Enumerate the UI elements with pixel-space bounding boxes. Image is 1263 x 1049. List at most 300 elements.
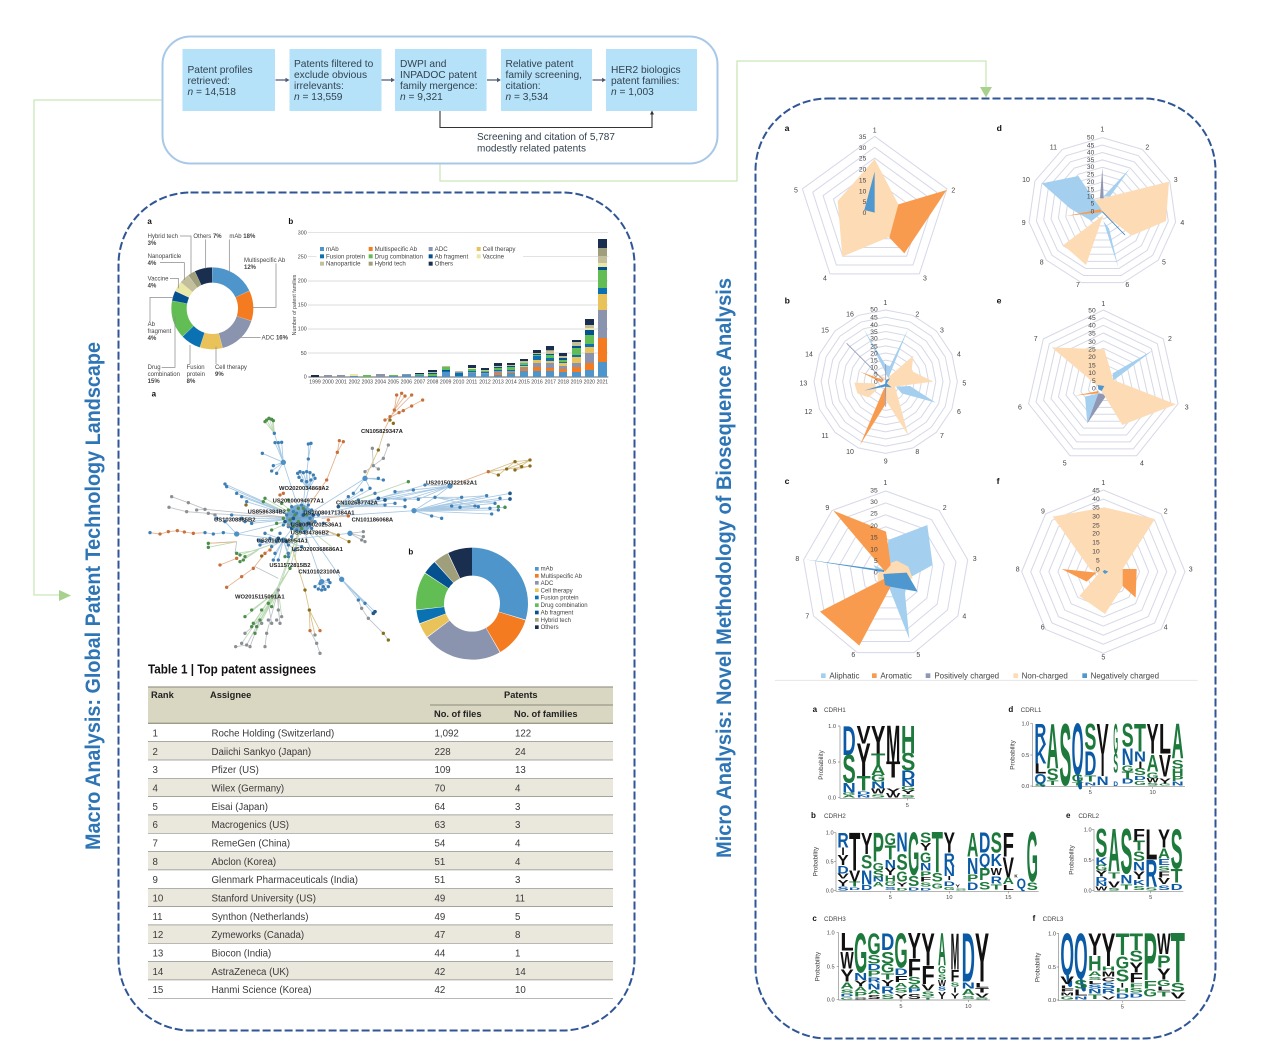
chart: radar d: 30 <box>1087 164 1095 171</box>
chart: sequence logo CDRH2: S <box>955 888 967 892</box>
table rows: 4 <box>515 784 521 794</box>
chart: sequence logo CDRH2: 5 <box>889 895 892 901</box>
chart: sequence logo CDRL3: Q <box>1060 920 1074 988</box>
text: screening note: modestly related patents <box>477 144 586 154</box>
chart: sequence logo CDRH1: a <box>813 705 818 714</box>
chart: radar e: 4 <box>1140 460 1144 467</box>
network nodes <box>150 393 530 653</box>
chart: sequence logo CDRL2: V <box>1108 879 1121 889</box>
secondary donut legend: mAb <box>541 567 554 573</box>
chart: radar d: 5 <box>1162 259 1166 266</box>
network patent labels: US20200368686A1 <box>292 547 344 553</box>
flow box: HER2 biologics families <box>606 49 697 111</box>
chart: sequence logo CDRH3: W <box>938 978 947 988</box>
chart: sequence logo CDRH1: Probability <box>818 749 825 780</box>
table rows: 4 <box>515 857 521 868</box>
chart: technology type donut: 3% <box>148 241 157 247</box>
chart: sequence logo CDRH3: G <box>854 922 867 986</box>
chart: sequence logo CDRH1: 5 <box>906 803 909 809</box>
chart: radar b: 1 <box>883 300 887 307</box>
chart: sequence logo CDRL1: Q <box>1034 771 1047 786</box>
chart: sequence logo CDRL3: Y <box>1088 927 1102 962</box>
chart: sequence logo CDRL2 <box>1066 811 1183 901</box>
chart: radar e: 5 <box>1092 378 1096 385</box>
chart: sequence logo CDRH2: G <box>885 881 896 888</box>
flow box: patent profiles retrieved: Patent profiles <box>188 65 253 76</box>
chart: sequence logo CDRH2: S <box>920 831 932 847</box>
table rows: 10 <box>515 985 526 996</box>
chart: sequence logo CDRL1: I <box>1138 760 1143 771</box>
chart: sequence logo CDRH3: S <box>854 996 867 1000</box>
chart: sequence logo CDRH2: T <box>849 880 862 889</box>
chart: radar d: 45 <box>1087 142 1095 149</box>
chart: bar chart axes and legend: 2006 <box>401 380 412 386</box>
chart: radar c: c <box>785 476 790 486</box>
chart: sequence logo CDRH1: V <box>857 721 871 749</box>
chart: sequence logo CDRH2: N <box>873 877 885 884</box>
chart: sequence logo CDRL2: D <box>1171 882 1183 892</box>
chart: sequence logo CDRL2: N <box>1095 881 1108 888</box>
legend: residue classes <box>775 671 1198 680</box>
chart: technology type donut: 4% <box>148 261 157 267</box>
chart: sequence logo CDRL1: A <box>1147 751 1159 778</box>
chart: sequence logo CDRH3: D <box>867 962 881 972</box>
table rows: 51 <box>434 857 445 868</box>
chart: sequence logo CDRH1: S <box>871 793 888 799</box>
chart: radar c: 6 <box>851 652 855 659</box>
table header: No. of families <box>514 709 578 719</box>
table rows: 14 <box>515 967 526 978</box>
table header: No. of files <box>434 709 482 719</box>
chart: radar c: 10 <box>870 547 878 554</box>
chart: sequence logo CDRL2: S <box>1095 822 1107 866</box>
chart: bar chart axes and legend: 2001 <box>335 380 347 386</box>
chart: sequence logo CDRL3: W <box>1157 928 1171 961</box>
text: S <box>1171 818 1183 881</box>
chart: sequence logo CDRH2 <box>811 811 1039 901</box>
chart: bar chart axes and legend: 2009 <box>440 380 452 386</box>
secondary donut legend: ADC <box>541 581 554 587</box>
chart: radar d: 3 <box>1174 177 1178 184</box>
secondary donut legend: Ab fragment <box>541 611 574 617</box>
chart: sequence logo CDRL2: G <box>1095 863 1107 873</box>
chart: sequence logo CDRL3: F <box>1060 988 1077 993</box>
bar chart legend: Others <box>435 261 453 268</box>
chart: radar f: f <box>997 476 1000 486</box>
chart: bar chart axes and legend: 100 <box>298 327 307 333</box>
chart: sequence logo CDRL1: V <box>1159 749 1171 784</box>
panel: macro analysis dashed frame <box>118 192 634 1030</box>
chart: sequence logo CDRL1: 0.0 <box>1021 784 1029 790</box>
chart: sequence logo CDRL2: S <box>1133 849 1145 864</box>
chart: radar b: 15 <box>870 357 878 364</box>
chart: radar d: 11 <box>1050 145 1057 152</box>
chart: radar d: 25 <box>1087 172 1095 179</box>
chart: bar chart axes and legend: 2003 <box>362 380 373 386</box>
table rows: 1,092 <box>434 728 459 740</box>
chart: radar b: 25 <box>870 343 878 350</box>
chart: sequence logo CDRH2: V <box>849 869 861 886</box>
chart: radar d: 40 <box>1087 150 1095 157</box>
chart: sequence logo CDRL3: V <box>1171 990 1186 1000</box>
chart: radar a: 5 <box>794 187 798 194</box>
chart: sequence logo CDRH1: Y <box>901 790 916 796</box>
table rows: 49 <box>434 894 445 904</box>
chart: sequence logo CDRL2: A <box>1158 846 1170 862</box>
table rows: 3 <box>152 765 158 776</box>
chart: sequence logo CDRL2: 0.0 <box>1084 889 1092 895</box>
chart: sequence logo CDRH1: S <box>901 793 917 798</box>
chart: bar chart axes and legend: 0 <box>304 375 307 381</box>
chart: radar d: 35 <box>1087 157 1095 164</box>
chart: sequence logo CDRH1: N <box>871 780 885 791</box>
chart: sequence logo CDRL2: S <box>1145 886 1158 891</box>
chart: radar e: 30 <box>1088 339 1096 346</box>
text: T <box>1171 919 1185 999</box>
chart: sequence logo CDRH3: T <box>975 988 989 995</box>
chart: sequence logo CDRH2: I <box>841 846 845 858</box>
chart: patent citation network <box>150 390 530 653</box>
chart: sequence logo CDRH3: S <box>867 995 881 1001</box>
chart: sequence logo CDRL3: L <box>1157 987 1173 993</box>
chart: sequence logo CDRH2: Y <box>896 883 908 889</box>
chart: sequence logo CDRH3: F <box>921 960 935 990</box>
chart: sequence logo CDRL1 <box>1008 705 1185 804</box>
chart: sequence logo CDRL2: T <box>1108 870 1120 880</box>
chart: radar f <box>997 476 1193 661</box>
chart: sequence logo CDRL2: T <box>1133 839 1145 855</box>
chart: sequence logo CDRH3: D <box>881 929 894 956</box>
flow box: patents filtered: irrelevants: <box>294 81 344 92</box>
chart: sequence logo CDRL1: S <box>1134 767 1147 778</box>
chart: secondary donut: b <box>408 548 413 557</box>
network patent labels: US20150322162A1 <box>426 480 478 486</box>
chart: sequence logo CDRL2: V <box>1158 876 1171 886</box>
chart: sequence logo CDRH2: G <box>896 870 908 886</box>
chart: sequence logo CDRH2: D <box>908 886 921 892</box>
chart: sequence logo CDRH2: T <box>932 822 943 886</box>
legend: residue classes: Negatively charged <box>1091 671 1159 680</box>
chart: sequence logo CDRL2: S <box>1158 866 1171 873</box>
chart: sequence logo CDRH3: A <box>854 987 869 994</box>
table rows: 4 <box>152 784 158 794</box>
chart: sequence logo CDRH2: R <box>991 875 1002 886</box>
chart: radar a: 4 <box>823 276 827 283</box>
chart: radar f: 10 <box>1092 548 1100 555</box>
chart: radar f: 3 <box>1189 567 1193 574</box>
chart: bar chart axes and legend: 2010 <box>453 380 465 386</box>
chart: sequence logo CDRL2: D <box>1095 877 1108 884</box>
table rows: Roche Holding (Switzerland) <box>212 728 334 740</box>
chart: radar c: 15 <box>870 535 878 542</box>
chart: radar f: 2 <box>1164 508 1168 515</box>
chart: sequence logo CDRH2: 0.5 <box>826 860 834 866</box>
chart: radar c: 7 <box>805 614 809 621</box>
table rows: 8 <box>152 857 158 868</box>
chart: sequence logo CDRH1: G <box>842 792 858 796</box>
chart: sequence logo CDRH3: F <box>908 955 921 983</box>
chart: sequence logo CDRH3: S <box>921 990 935 999</box>
chart: radar e: 7 <box>1034 336 1038 343</box>
chart: sequence logo CDRL3: L <box>1088 980 1102 986</box>
bar chart legend: ADC <box>435 246 448 253</box>
chart: sequence logo CDRL3: Y <box>1157 966 1171 983</box>
chart: radar a: 25 <box>859 156 867 163</box>
chart: sequence logo CDRH2: CDRH2 <box>824 813 846 820</box>
chart: sequence logo CDRL1: S <box>1059 705 1071 804</box>
network patent labels: US20100188954A1 <box>257 539 309 545</box>
chart: radar e: 20 <box>1088 354 1096 361</box>
chart: sequence logo CDRL3: 5 <box>1121 1005 1124 1011</box>
chart: sequence logo CDRH3: V <box>975 993 990 999</box>
text: Y <box>975 919 989 997</box>
chart: sequence logo CDRL1: N <box>1172 781 1184 787</box>
chart: radar e: e <box>997 295 1002 305</box>
chart: sequence logo CDRL1: G <box>1159 783 1174 787</box>
table rows: 7 <box>152 838 158 850</box>
chart: sequence logo CDRL3: P <box>1157 951 1171 971</box>
network patent labels: US20080171384A1 <box>303 510 355 516</box>
chart: sequence logo CDRL3: S <box>1129 949 1143 966</box>
chart: sequence logo CDRH2: D <box>849 886 861 891</box>
chart: sequence logo CDRH2: N <box>861 866 872 889</box>
chart: sequence logo CDRH3: Y <box>854 979 868 989</box>
chart: radar f: 5 <box>1101 654 1105 661</box>
network patent labels: US20100094977A1 <box>273 499 325 505</box>
chart: radar d: 20 <box>1087 179 1095 186</box>
chart: sequence logo CDRH3: A <box>962 987 975 997</box>
chart: sequence logo CDRH3: 10 <box>965 1004 971 1010</box>
chart: sequence logo CDRL2: S <box>1120 816 1132 887</box>
chart: sequence logo CDRH3: A <box>840 980 854 990</box>
bar chart legend: Fusion protein <box>326 253 366 260</box>
chart: sequence logo CDRH3: W <box>840 947 854 974</box>
chart: sequence logo CDRH2: K <box>991 850 1002 870</box>
chart: sequence logo CDRL3: P <box>1143 920 1157 995</box>
chart: radar d: 4 <box>1180 220 1184 227</box>
chart: sequence logo CDRL2: E <box>1158 857 1171 867</box>
chart: sequence logo CDRL1: L <box>1159 715 1171 763</box>
chart: sequence logo CDRL1: R <box>1034 718 1046 751</box>
network patent labels: US11572815B2 <box>269 563 311 569</box>
chart: sequence logo CDRH3: S <box>867 952 881 966</box>
chart: sequence logo CDRH3: F <box>951 967 959 986</box>
chart: sequence logo CDRH2: S <box>908 874 920 890</box>
chart: radar b: 0 <box>874 379 878 386</box>
chart: sequence logo CDRL3: S <box>1171 981 1185 995</box>
chart: bar chart axes and legend: 300 <box>298 230 307 236</box>
chart: radar c: 5 <box>874 558 878 565</box>
chart: radar c: 9 <box>825 505 829 512</box>
chart: radar b: 30 <box>870 336 878 343</box>
chart: sequence logo CDRL1: H <box>1172 767 1184 779</box>
chart: sequence logo CDRH2: P <box>979 864 990 884</box>
bar chart legend: Nanoparticle <box>326 261 361 268</box>
table rows: Stanford University (US) <box>212 894 316 904</box>
chart: bar chart axes and legend: 2004 <box>375 380 386 386</box>
chart: radar e: 15 <box>1088 362 1096 369</box>
chart: technology type donut: Multispecific Ab <box>244 258 286 264</box>
chart: sequence logo CDRL1: G <box>1134 781 1148 787</box>
chart: sequence logo CDRL2: Y <box>1095 869 1108 879</box>
chart: sequence logo CDRH2: 10 <box>946 895 952 901</box>
chart: sequence logo CDRL1: T <box>1134 717 1146 761</box>
chart: technology type donut: 4% <box>148 336 157 342</box>
chart: technology type donut: Fusion <box>187 365 205 371</box>
chart: sequence logo CDRH3: A <box>894 982 908 989</box>
flow box: patent profiles retrieved <box>182 49 275 111</box>
table rows: 10 <box>152 894 164 904</box>
chart: sequence logo CDRL1: K <box>1034 738 1046 769</box>
chart: sequence logo CDRL1: T <box>1072 781 1084 787</box>
network patent labels: CN101186068A <box>352 518 394 524</box>
chart: sequence logo CDRL3: T <box>1157 990 1172 999</box>
table rows: 13 <box>515 765 526 776</box>
chart: sequence logo CDRH3: S <box>975 998 993 1000</box>
chart: sequence logo CDRL1: N <box>1122 744 1134 771</box>
chart: radar b: 45 <box>870 314 878 321</box>
chart: sequence logo CDRH3: A <box>908 984 921 990</box>
secondary donut legend: Multispecific Ab <box>541 574 583 580</box>
table header: Assignee <box>210 690 251 700</box>
chart: sequence logo CDRL1: 1.0 <box>1021 721 1029 727</box>
chart: radar b: 13 <box>799 380 807 387</box>
chart: sequence logo CDRH2: K <box>1014 873 1018 879</box>
chart: sequence logo CDRL1: G <box>1122 764 1134 774</box>
table rows: 8 <box>515 930 520 941</box>
chart: radar e <box>997 295 1189 467</box>
chart: sequence logo CDRL3: I <box>1121 982 1124 989</box>
chart: secondary donut <box>408 548 588 646</box>
chart: sequence logo CDRL1: S <box>1122 717 1134 754</box>
chart: sequence logo CDRL2: 0.5 <box>1084 858 1092 864</box>
chart: radar a: 35 <box>859 134 867 141</box>
chart: sequence logo CDRH3: G <box>867 928 881 961</box>
chart: sequence logo CDRL3: f <box>1033 914 1036 923</box>
chart: radar b: 14 <box>805 352 813 359</box>
chart: patent citation network: a <box>152 390 157 399</box>
chart: sequence logo CDRH2: L <box>1003 883 1015 892</box>
bar chart legend: Multispecific Ab <box>375 246 418 253</box>
table rows: 5 <box>152 802 158 813</box>
chart: sequence logo CDRH1: T <box>886 756 900 782</box>
chart: bar chart axes and legend: 2021 <box>597 380 608 386</box>
chart: sequence logo CDRL2: Y <box>1133 870 1145 882</box>
chart: sequence logo CDRH2: b <box>811 811 816 820</box>
flow box: family mergence: DWPI and <box>400 59 447 70</box>
chart: sequence logo CDRH3: 5 <box>899 1004 903 1010</box>
chart: sequence logo CDRH2: G <box>920 851 931 867</box>
chart: sequence logo CDRH2: S <box>837 887 849 893</box>
chart: sequence logo CDRL1: S <box>1084 716 1096 757</box>
chart: radar a: 10 <box>859 188 867 195</box>
chart: sequence logo CDRH3: D <box>894 967 908 977</box>
chart: sequence logo CDRH3: S <box>908 976 922 987</box>
chart: radar a: 30 <box>859 145 867 152</box>
secondary donut legend: Hybrid tech <box>541 618 571 624</box>
chart: sequence logo CDRL1: 5 <box>1089 790 1092 796</box>
chart: radar d: 8 <box>1040 259 1044 266</box>
text: A <box>1172 713 1184 769</box>
flow box: patents filtered: n = 13,559 <box>294 92 343 103</box>
table rows: 54 <box>434 838 446 850</box>
chart: bar chart axes and legend: 2015 <box>518 380 530 386</box>
chart: radar c: 20 <box>870 523 878 530</box>
network patent labels <box>214 429 478 600</box>
network patent labels: CN105829347A <box>361 429 404 435</box>
chart: sequence logo CDRL2: F <box>1158 869 1170 879</box>
chart: sequence logo CDRL2: W <box>1095 887 1109 893</box>
chart: technology type donut: Hybrid tech <box>148 234 178 240</box>
chart: sequence logo CDRH3: R <box>881 985 894 996</box>
chart: radar d <box>997 123 1184 289</box>
chart: radar c: 30 <box>870 499 878 506</box>
table rows: 63 <box>434 820 445 831</box>
chart: sequence logo CDRH2: S <box>861 852 872 873</box>
chart: sequence logo CDRH3: CDRH3 <box>824 916 846 923</box>
chart: sequence logo CDRH2: D <box>861 883 872 892</box>
chart: sequence logo CDRH1 <box>813 705 917 809</box>
table rows: 11 <box>515 894 525 904</box>
chart: bar chart axes and legend: 150 <box>298 303 307 309</box>
chart: radar f: 15 <box>1092 540 1100 547</box>
chart: sequence logo CDRH3: F <box>894 974 908 984</box>
chart: sequence logo CDRL3: Probability <box>1034 952 1041 982</box>
chart: bar chart axes and legend: Number of patent families <box>292 274 298 335</box>
chart: radar f: 20 <box>1092 531 1100 538</box>
chart: bar chart axes and legend: 2018 <box>558 380 569 386</box>
table rows: 3 <box>515 875 520 886</box>
chart: radar d: 10 <box>1087 194 1095 201</box>
network patent labels: US9434786B2 <box>291 530 330 536</box>
chart: radar e: 0 <box>1092 386 1096 393</box>
chart: bar chart axes and legend: 2002 <box>349 380 360 386</box>
chart: sequence logo CDRH2: S <box>896 849 908 875</box>
table rows: 1 <box>152 728 158 740</box>
chart: radar d: 5 <box>1091 201 1095 208</box>
chart: sequence logo CDRL3: H <box>1102 967 1115 973</box>
chart: sequence logo CDRL1: D <box>1113 781 1118 788</box>
chart: radar b: 5 <box>874 371 878 378</box>
chart: sequence logo CDRL3: G <box>1157 978 1171 988</box>
chart: sequence logo CDRH2: D <box>837 864 849 876</box>
chart: sequence logo CDRL1: N <box>1097 774 1109 788</box>
chart: sequence logo CDRL3: H <box>1116 988 1130 995</box>
chart: technology type donut: Vaccine <box>148 276 169 282</box>
chart: sequence logo CDRH1: Y <box>871 718 885 762</box>
network patent labels: US10308885B2 <box>214 517 256 523</box>
chart: sequence logo CDRH1: Y <box>857 734 871 787</box>
chart: sequence logo CDRH3: A <box>938 923 946 975</box>
chart: radar b: 6 <box>957 409 961 416</box>
chart: sequence logo CDRH1: T <box>871 750 886 769</box>
flow box: relative screening: n = 3,534 <box>506 92 549 103</box>
chart: sequence logo CDRL2: Probability <box>1069 844 1076 875</box>
table rows: 11 <box>152 912 163 923</box>
table rows: 109 <box>434 765 451 776</box>
table rows: AstraZeneca (UK) <box>212 967 289 978</box>
chart: technology type donut: fragment <box>148 329 172 335</box>
chart: sequence logo CDRL3: D <box>1129 993 1143 999</box>
chart: radar d: 2 <box>1145 145 1149 152</box>
chart: sequence logo CDRH3: Probability <box>814 951 821 981</box>
chart: sequence logo CDRH3: Y <box>951 992 960 1001</box>
chart: sequence logo CDRH3: R <box>867 976 882 985</box>
chart: sequence logo CDRH1: CDRH1 <box>824 707 846 714</box>
chart: sequence logo CDRH3: 0.0 <box>827 997 835 1003</box>
chart: radar e: 3 <box>1185 404 1189 411</box>
table rows: 70 <box>434 784 446 794</box>
